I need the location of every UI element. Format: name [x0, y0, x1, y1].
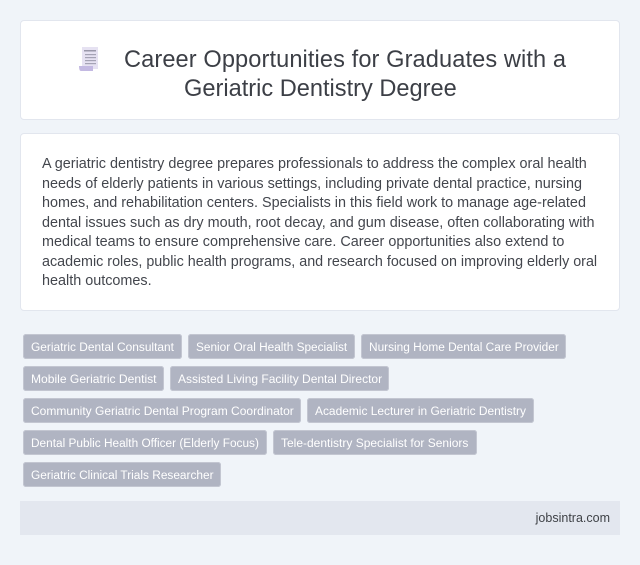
- title: Geriatric Dentistry Degree: [184, 76, 457, 102]
- tag: Mobile Geriatric Dentist: [31, 372, 157, 386]
- tag: Nursing Home Dental Care Provider: [369, 340, 559, 354]
- panel: title card: [20, 20, 620, 120]
- tag: Geriatric Clinical Trials Researcher: [31, 468, 214, 482]
- footer bar: [20, 501, 620, 535]
- text block: description: homes, and rehabilitation centers. Specialists in this field work to manage age-related: [42, 195, 586, 211]
- text block: description: medical teams to ensure comprehensive care. Career opportunities also extend to: [42, 234, 564, 250]
- tag: Geriatric Dental Consultant: [31, 340, 174, 354]
- title: Career Opportunities for Graduates with a: [124, 47, 566, 73]
- tag: [23, 334, 182, 359]
- tag: Tele-dentistry Specialist for Seniors: [281, 436, 468, 450]
- text block: description: health outcomes.: [42, 273, 152, 289]
- tag: Senior Oral Health Specialist: [196, 340, 347, 354]
- tag: [361, 334, 566, 359]
- tag: [273, 430, 477, 455]
- tag: [23, 430, 267, 455]
- text block: description: [42, 156, 597, 289]
- panel: description card: [20, 133, 620, 311]
- icon: document: [79, 47, 98, 71]
- footer text: jobsintra.com: [536, 511, 610, 525]
- title: [124, 47, 566, 102]
- tag: Academic Lecturer in Geriatric Dentistry: [315, 404, 526, 418]
- tag: Assisted Living Facility Dental Director: [178, 372, 382, 386]
- panel: career tags: [23, 334, 566, 487]
- tag: [188, 334, 355, 359]
- text block: description: dental issues such as dry mouth, root decay, and gum disease, often collaborating with: [42, 215, 594, 231]
- tag: [23, 398, 301, 423]
- tag: [307, 398, 534, 423]
- tag: Community Geriatric Dental Program Coordinator: [31, 404, 294, 418]
- text block: description: needs of elderly patients in various settings, including private dental practice, nursing: [42, 176, 582, 192]
- text block: description: A geriatric dentistry degree prepares professionals to address the complex oral health: [42, 156, 587, 172]
- tag: Dental Public Health Officer (Elderly Focus): [31, 436, 259, 450]
- tag: [23, 366, 164, 391]
- tag: [170, 366, 389, 391]
- tag: [23, 462, 221, 487]
- text block: description: academic roles, public health programs, and research focused on improving elderly oral: [42, 254, 597, 270]
